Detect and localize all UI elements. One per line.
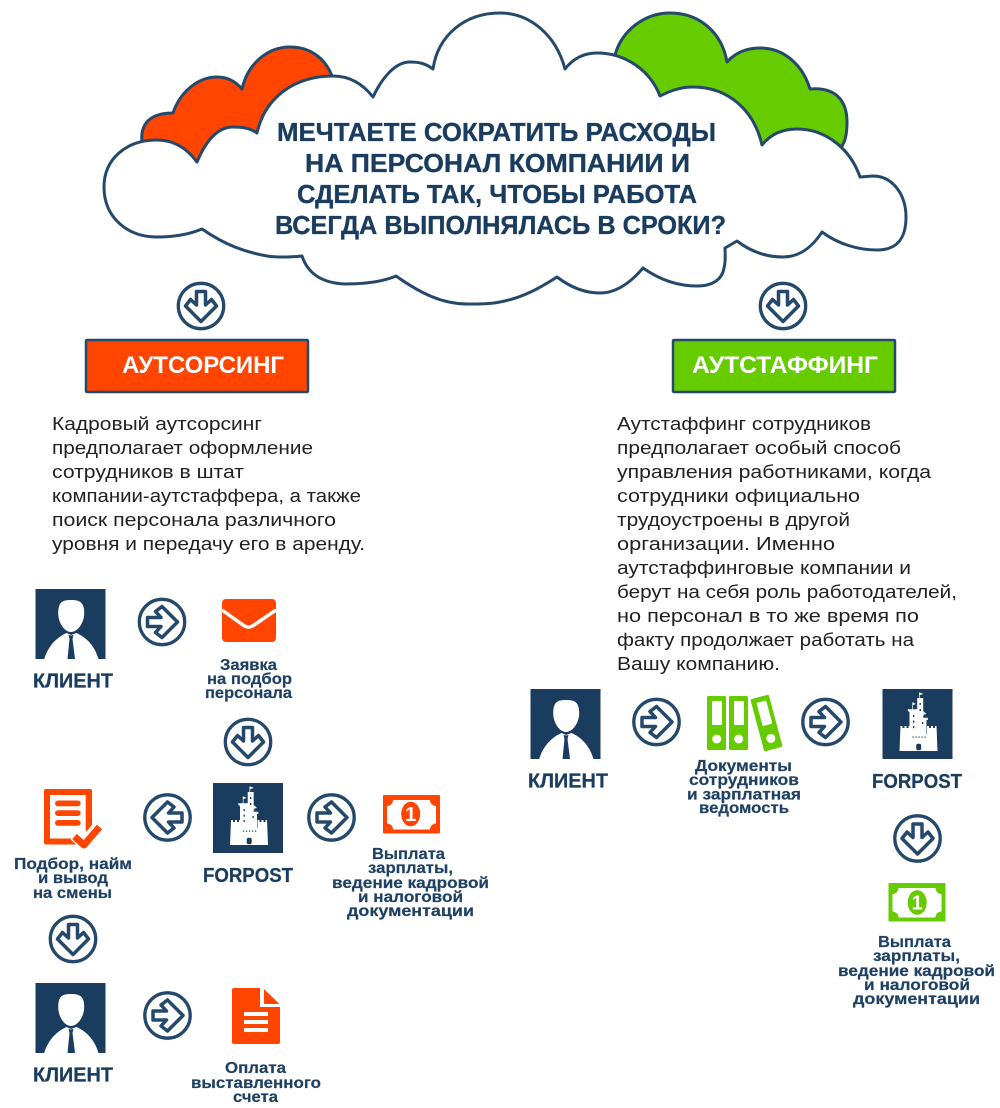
arrow: request to forpost [225,719,271,765]
label: payroll [838,934,995,1008]
icon: invoice document [232,988,280,1044]
text block: outsourcing description: поиск персонала различного [52,510,336,530]
text block: outstaffing description: берут на себя роль работодателей, [617,582,957,602]
label: hiring: и вывод [38,870,108,887]
label: request: персонала [205,685,292,702]
text block: outstaffing description: организации. Именно [617,534,835,554]
text block: outstaffing description: управления работниками, когда [617,462,932,482]
text block: outstaffing description: факту продолжает работать на [617,630,915,650]
label: payroll: зарплаты, [873,948,960,965]
label: client: КЛИЕНТ [33,670,113,692]
arrow: documents to forpost [803,699,848,745]
text block: outsourcing description: Кадровый аутсорсинг [52,414,262,434]
arrow: forpost to payroll [309,795,354,840]
arrow: client to documents [634,699,679,745]
arrow: cloud to outsourcing [178,283,224,329]
label: payroll: Выплата [372,846,445,863]
arrow: client to invoice [145,993,190,1038]
label: documents: Документы [695,758,792,775]
label: hiring: на смены [33,885,112,902]
label: payroll: и налоговой [358,889,463,906]
label: forpost: FORPOST [872,771,962,793]
label: request: на подбор [207,671,292,688]
arrow: hiring to client [50,916,96,962]
label: hiring: Подбор, найм [14,856,132,873]
label: invoice payment: выставленного [191,1075,321,1092]
icon: banknote green: 1 [912,892,923,914]
icon: forpost castle [882,689,952,759]
label: payroll: ведение кадровой [838,963,995,980]
heading: outstaffing: АУТСТАФФИНГ [692,352,878,379]
icon: client (outstaffing) [530,689,600,759]
label: payroll: и налоговой [864,977,970,994]
icon: banknote orange: 1 [405,804,416,826]
arrow: client to request [139,599,185,645]
icon: envelope [222,599,276,642]
icon: client (outsourcing bottom) [36,983,106,1053]
icon: checklist [44,789,100,845]
label: invoice payment: счета [233,1089,278,1106]
label: payroll: ведение кадровой [332,875,489,892]
label: documents: сотрудников [689,772,799,789]
label: documents [687,758,801,817]
label: request: Заявка [220,657,277,674]
text block: outstaffing description: предполагает особый способ [617,438,901,458]
label: payroll: зарплаты, [368,860,453,877]
cloud: orange back lobes [142,47,332,185]
label: payroll [332,846,489,920]
text block: outsourcing description [52,414,365,554]
arrow: forpost to hiring [145,795,190,840]
icon: client (outsourcing top) [36,589,106,659]
label: payroll: Выплата [878,934,951,951]
heading: outsourcing: АУТСОРСИНГ [122,352,284,379]
icon: forpost castle [213,783,283,853]
label: documents: и зарплатная [687,786,801,804]
label: forpost: FORPOST [203,865,293,887]
label: invoice payment [191,1060,321,1106]
label: invoice payment: Оплата [225,1060,286,1077]
text block: outsourcing description: сотрудников в штат [52,462,244,482]
title: НА ПЕРСОНАЛ КОМПАНИИ И [305,148,690,178]
title: ВСЕГДА ВЫПОЛНЯЛАСЬ В СРОКИ? [275,210,726,240]
heading: outstaffing [673,340,895,392]
title: СДЕЛАТЬ ТАК, ЧТОБЫ РАБОТА [297,179,697,209]
text block: outstaffing description: но персонал в то же время по [617,606,919,626]
text block: outstaffing description: сотрудники официально [617,486,860,506]
label: client: КЛИЕНТ [33,1064,113,1086]
label: documents: ведомость [699,800,789,817]
icon: folders [707,695,783,752]
title: МЕЧТАЕТЕ СОКРАТИТЬ РАСХОДЫ [277,117,716,147]
icon: banknote green [888,883,946,922]
text block: outsourcing description: уровня и передачу его в аренду. [52,534,365,554]
text block: outstaffing description: аутстаффинговые компании и [617,558,911,578]
arrow: cloud to outstaffing [760,283,806,329]
text block: outstaffing description: Вашу компанию. [617,654,780,674]
cloud: green back lobes [615,13,847,190]
text block: outstaffing description [617,414,957,674]
label: hiring [14,856,132,902]
title [275,117,726,240]
label: payroll: документации [347,903,474,920]
text block: outstaffing description: Аутстаффинг сотрудников [617,414,871,434]
text block: outstaffing description: трудоустроены в другой [617,510,850,530]
label: payroll: документации [853,991,980,1008]
text block: outsourcing description: предполагает оформление [52,438,313,458]
label: client: КЛИЕНТ [528,770,608,792]
cloud: white front bubble [104,13,906,304]
text block: outsourcing description: компании-аутстаффера, а также [52,486,361,506]
icon: banknote orange [383,795,440,834]
label: request [205,657,292,702]
heading: outsourcing [86,340,308,392]
arrow: forpost to payroll [895,816,940,861]
